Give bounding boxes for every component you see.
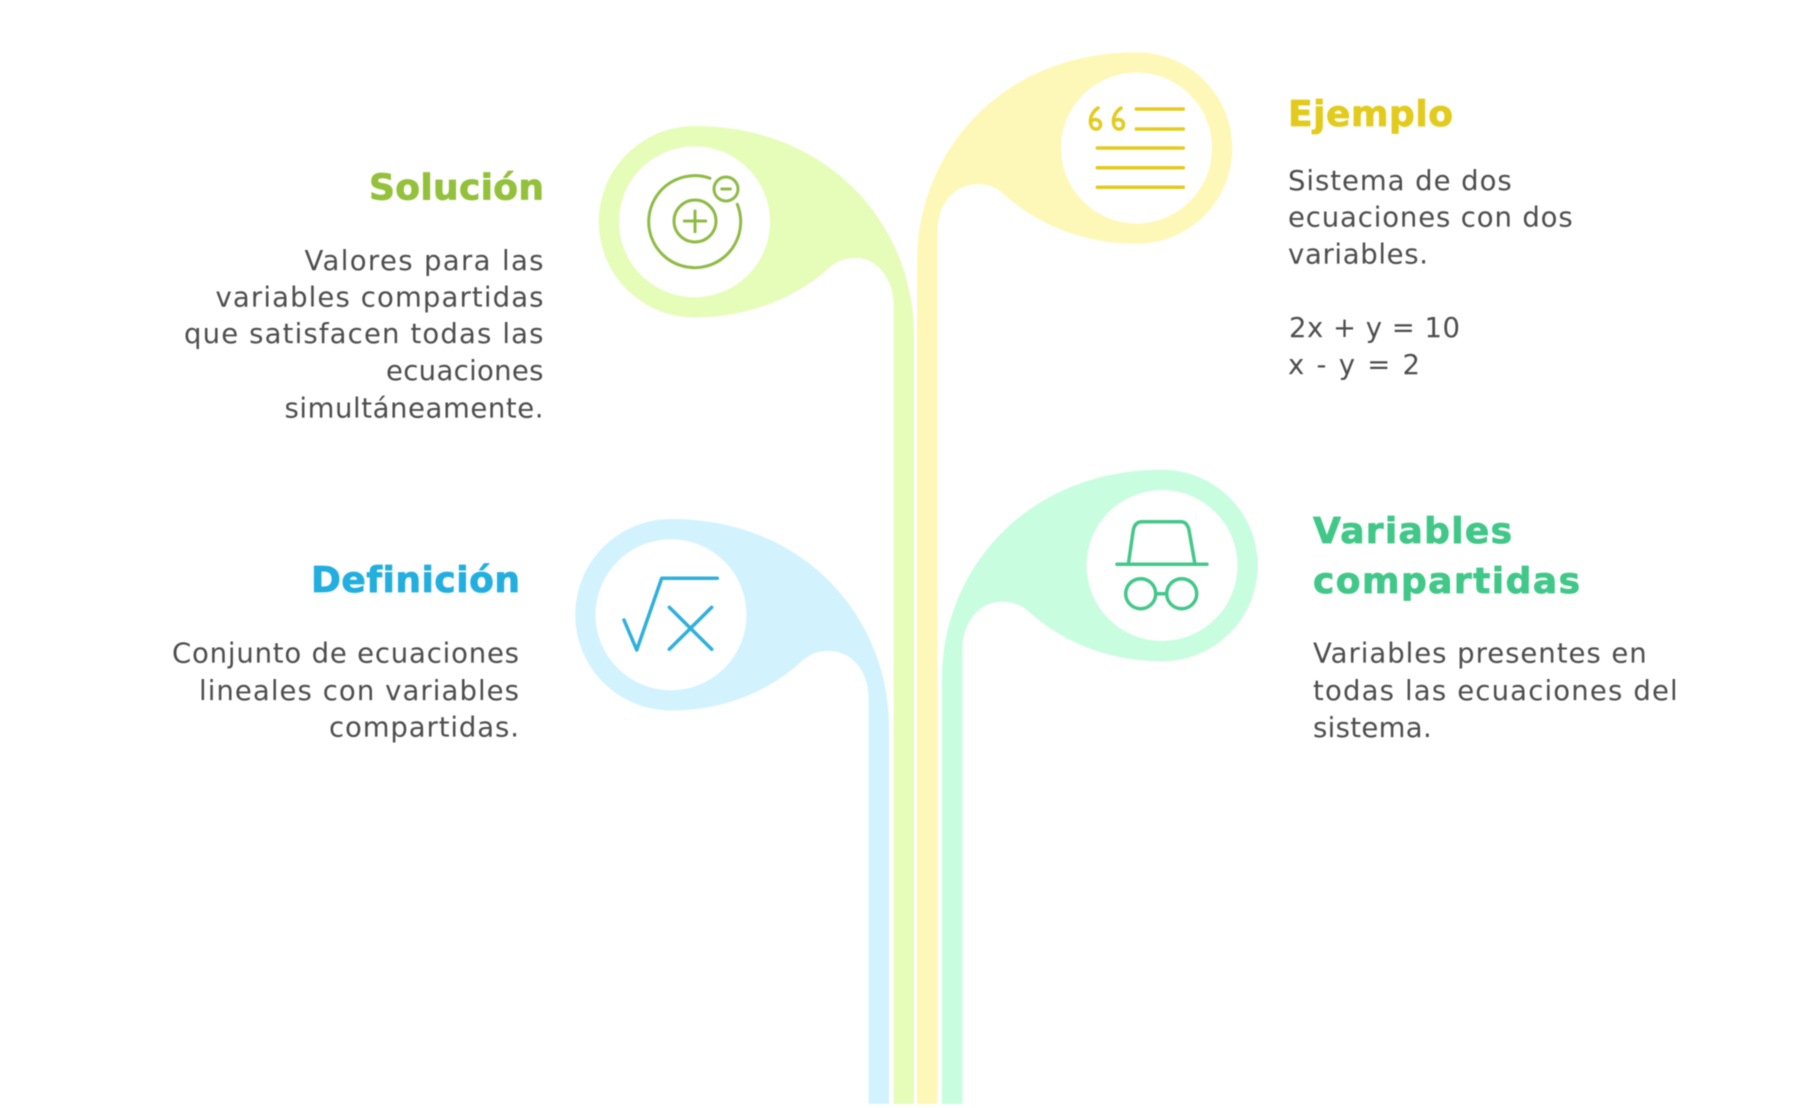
text block: Solución: ecuaciones [386, 355, 544, 387]
text block: Solución: variables compartidas [216, 282, 544, 314]
panel: Solución [184, 126, 914, 1104]
panel: Ejemplo [917, 52, 1573, 1104]
inner circle: Definición [596, 539, 746, 690]
text block: Ejemplo [1288, 165, 1573, 381]
text block: Solución: que satisfacen todas las [184, 318, 544, 350]
text block: Solución: simultáneamente. [284, 393, 544, 425]
text block: Variables compartidas: sistema. [1313, 712, 1432, 744]
icon: hat and glasses [1117, 522, 1207, 609]
text block: Definición [172, 638, 519, 744]
heading: Ejemplo: Ejemplo [1288, 94, 1453, 135]
panel: Variables compartidas [942, 470, 1678, 1104]
inner circle: Ejemplo [1061, 72, 1212, 224]
icon: quotation and text lines [1090, 108, 1183, 187]
text block: Ejemplo: variables. [1288, 238, 1428, 270]
inner circle: Solución [619, 146, 770, 297]
text block: Definición: compartidas. [329, 712, 519, 744]
text block: Variables compartidas: Variables presentes en [1313, 638, 1647, 670]
text block: Solución [184, 245, 544, 425]
stem and bubble: Solución [599, 126, 914, 1104]
text block: Ejemplo: Sistema de dos [1288, 165, 1512, 197]
inner circle: Variables compartidas [1086, 490, 1238, 641]
heading: Variables compartidas [1313, 511, 1580, 602]
heading: Solución: Solución [369, 168, 544, 208]
icon: square root of x [624, 578, 717, 650]
text block: Definición: Conjunto de ecuaciones [172, 638, 519, 670]
text block: Definición: lineales con variables [199, 675, 519, 707]
text block: Variables compartidas [1313, 638, 1678, 744]
stem and bubble: Variables compartidas [942, 470, 1258, 1104]
panel: Definición [172, 519, 889, 1104]
text block: Variables compartidas: todas las ecuaciones del [1313, 675, 1678, 707]
heading: Definición: Definición [311, 560, 520, 601]
stem and bubble: Ejemplo [917, 52, 1232, 1104]
heading: Variables compartidas: compartidas [1313, 561, 1580, 602]
text block: Solución: Valores para las [304, 245, 544, 277]
text block: Ejemplo: ecuaciones con dos [1288, 202, 1573, 234]
heading: Variables compartidas: Variables [1313, 511, 1512, 552]
text block: Ejemplo: 2x + y = 10 [1289, 312, 1460, 344]
text block: Ejemplo: x - y = 2 [1288, 349, 1420, 381]
stem and bubble: Definición [575, 519, 889, 1104]
icon: atom with plus and minus [649, 176, 741, 268]
